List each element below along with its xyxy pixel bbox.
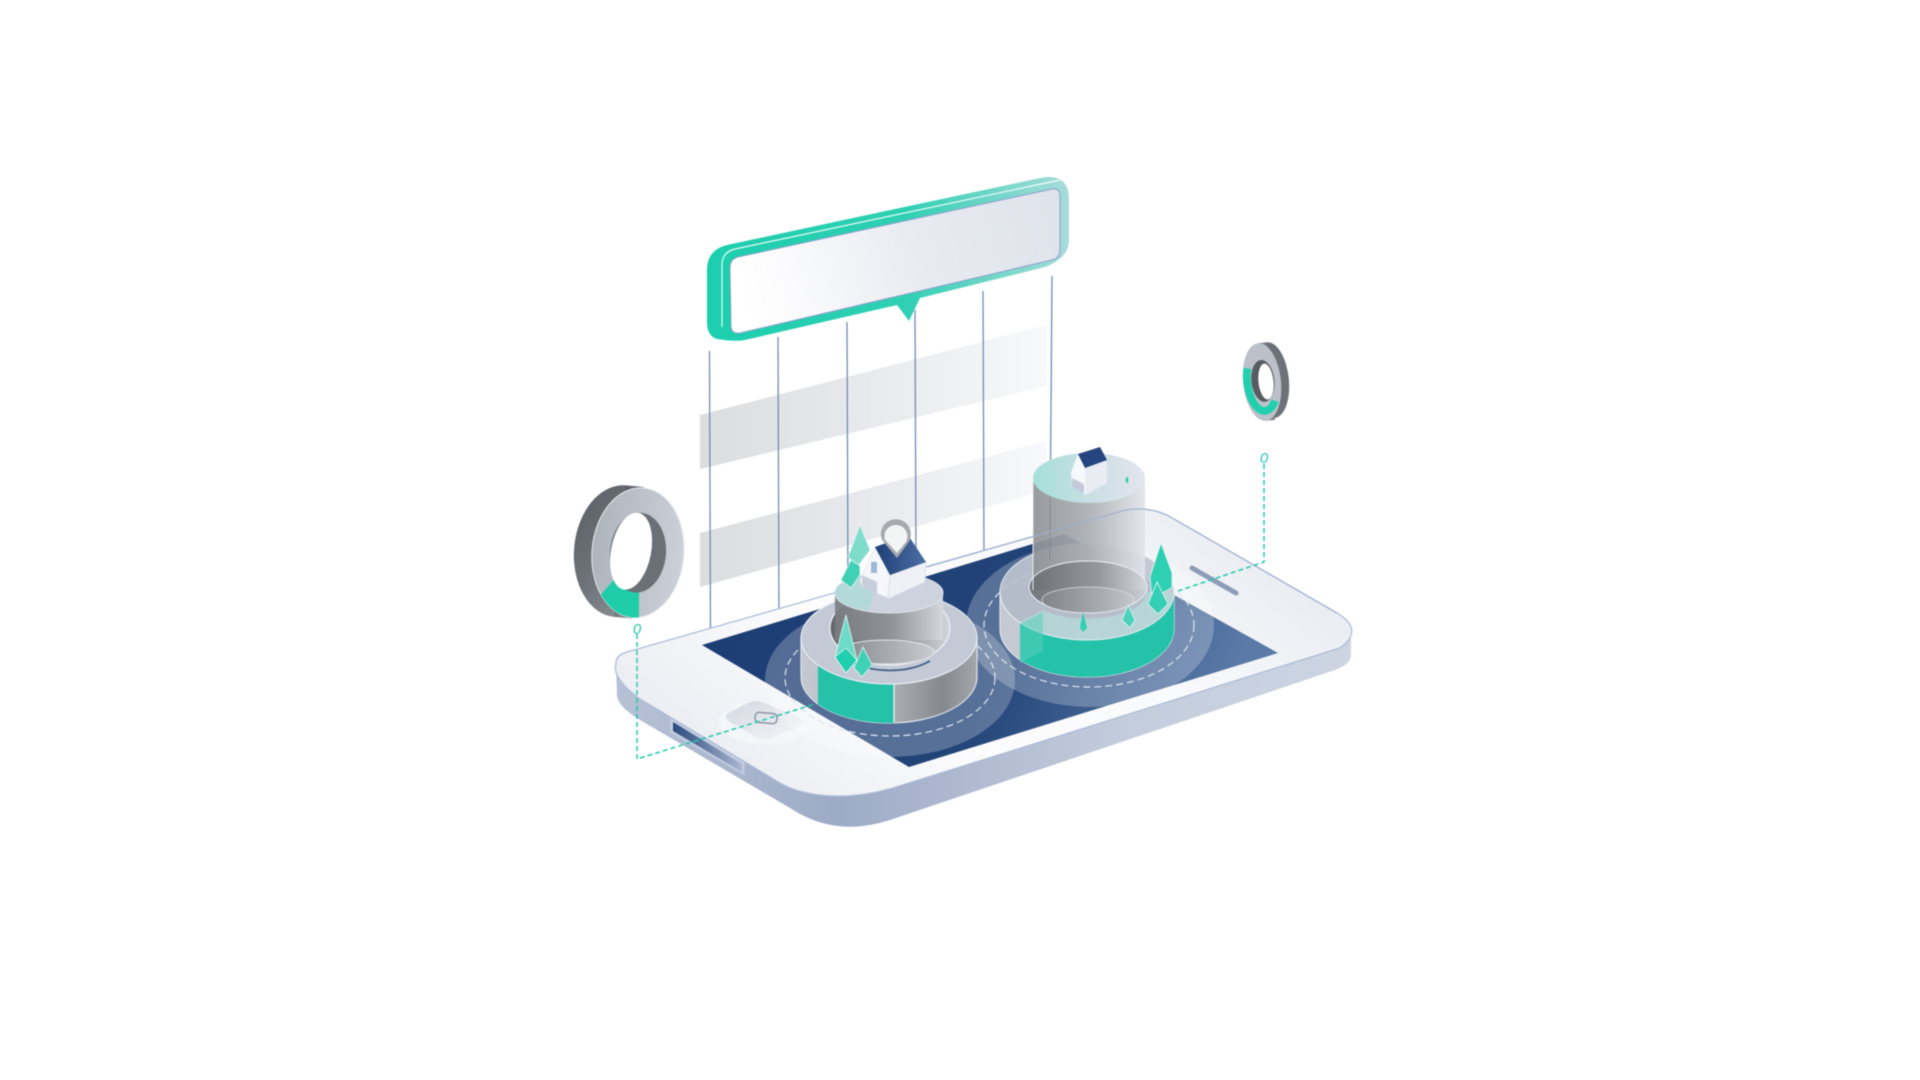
ring top: [1000, 544, 1174, 640]
ring side: [1000, 592, 1174, 677]
vertical data lines: [710, 276, 1052, 642]
illustration: isometric phone with map data: [573, 176, 1353, 828]
left ring and cylinder: [801, 573, 977, 723]
halo and dashed circle: right: [966, 543, 1214, 707]
phone top surface: [615, 509, 1352, 796]
donut face: [1239, 341, 1285, 423]
halo and dashed circle: left: [765, 603, 1015, 757]
phone top edge line over the cylinder: [927, 509, 1337, 613]
side slot: [670, 718, 745, 775]
ring hole: [830, 591, 950, 665]
donut teal slice: [600, 580, 640, 618]
speaker: [1192, 568, 1236, 593]
left donut chart: [573, 484, 685, 619]
trees on left ring: [835, 525, 872, 677]
house on right cylinder: [1071, 447, 1107, 495]
callout dashed line: right: [1175, 464, 1264, 592]
right ring and cylinder: [1000, 453, 1174, 677]
grey background bands: [700, 325, 1047, 587]
ring hole: [1029, 561, 1147, 613]
trees on right ring: [1080, 543, 1172, 632]
phone side: [616, 630, 1351, 827]
speech bubble: [707, 177, 1069, 341]
home button: [719, 700, 811, 744]
bubble inner panel: [730, 189, 1060, 333]
donut teal arc: [1246, 366, 1276, 412]
right donut chart: [1239, 340, 1293, 423]
inner cylinder: [835, 593, 943, 640]
label zero: right: 0: [1260, 450, 1269, 467]
dot on cylinder top: [1126, 477, 1128, 483]
ring top: [801, 592, 977, 684]
callout dashed line: left: [637, 634, 815, 759]
phone screen: [702, 534, 1278, 767]
house on left cylinder: [860, 535, 926, 599]
donut hole: [604, 508, 670, 595]
location pin: [881, 519, 911, 558]
phone: [615, 509, 1352, 827]
ring side: [801, 638, 977, 723]
tall cylinder: [1033, 478, 1145, 590]
label zero: left: 0: [633, 621, 642, 638]
